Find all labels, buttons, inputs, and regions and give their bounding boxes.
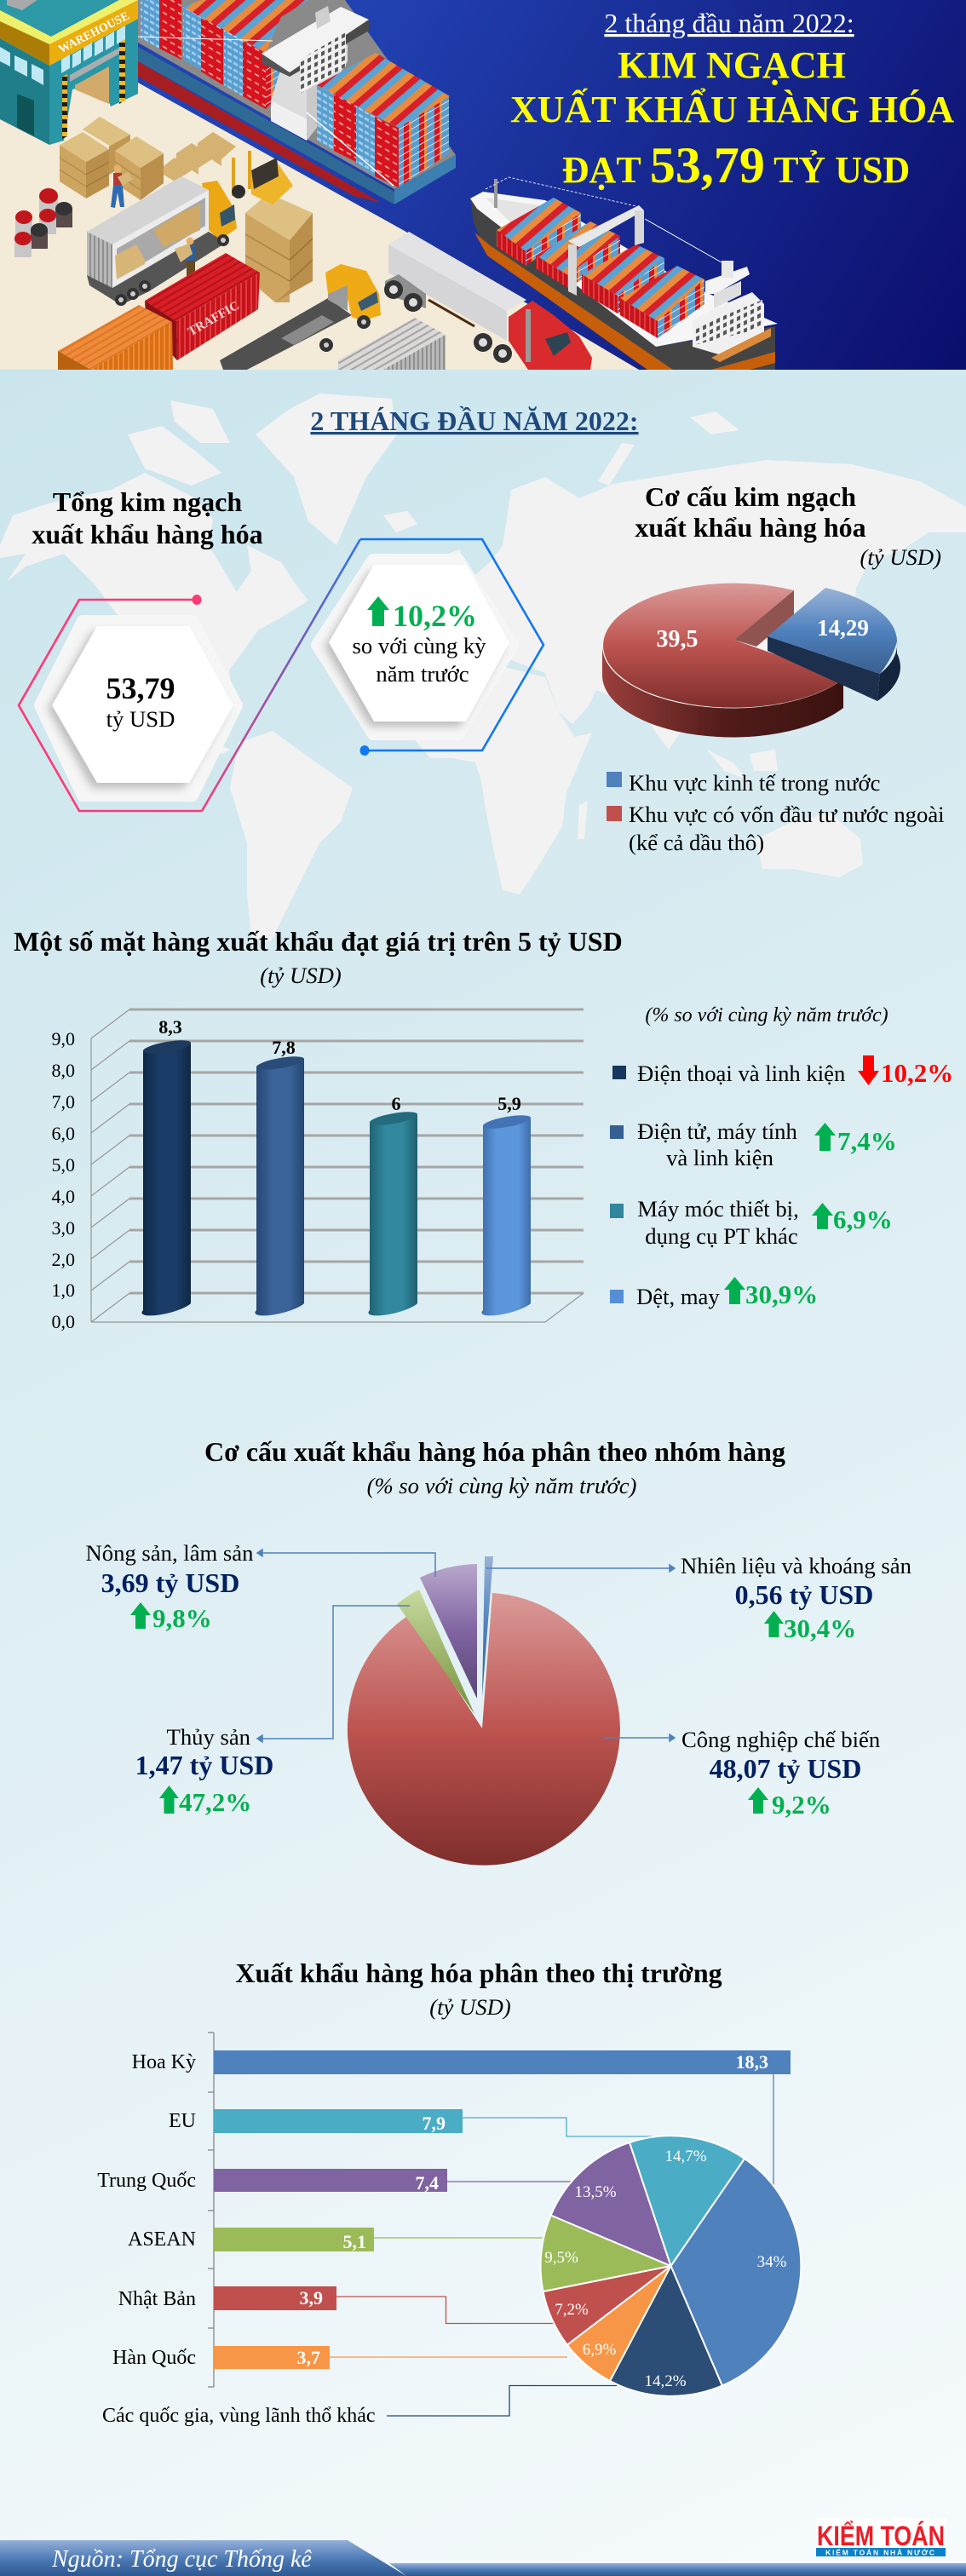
y axis labels: 3,0 [51,1217,75,1239]
unit note: (tỷ USD) [860,544,941,570]
pink hexagon outline [19,600,202,811]
leader: seafood [257,1606,410,1742]
callout: agriculture [86,1540,253,1633]
forklift [232,151,293,204]
container group C [582,244,664,296]
legend note: (% so với cùng kỳ năm trước) [645,1004,888,1026]
pie chart: markets: 9,5% [544,2249,578,2267]
legend: foreign: (kể cả dầu thô) [629,830,764,855]
y axis labels: 4,0 [51,1186,75,1207]
bar: China [97,2169,447,2194]
orange container [58,305,173,370]
bar: China: Trung Quốc [97,2170,196,2192]
ship container stack front [317,85,334,151]
pie chart: markets [541,2136,801,2396]
footer band left [0,2540,406,2576]
panel: total export [19,486,360,811]
bar: Japan: 3,9 [300,2287,323,2309]
pink dot [193,595,201,605]
callout: agriculture: 3,69 tỷ USD [101,1567,239,1598]
pie chart: markets: 34% [757,2253,787,2271]
legend: phones [612,1055,953,1088]
ship superstructure [693,292,764,355]
callout: fuel: 30,4% [784,1613,856,1643]
callout: seafood: Thủy sản [167,1724,250,1750]
growth note line 1: so với cùng kỳ [353,633,486,658]
gantry crane [568,205,644,247]
blue hexagon outline [360,539,543,750]
red truck cab [509,301,592,370]
bar: EU: 7,9 [423,2113,446,2134]
panel: export structure pie [602,481,945,855]
container ship top [138,0,456,204]
legend: electronics [610,1118,897,1170]
y axis labels: 5,0 [51,1154,75,1176]
legend: textile [610,1277,818,1309]
legend: electronics: 7,4% [837,1126,897,1156]
column: machinery 6: 6 [392,1093,400,1114]
worker carrying box [111,165,133,208]
column: textile 5.9 [481,1093,532,1315]
bar: USA [132,2050,791,2074]
column: phones 8.3: 8,3 [158,1016,182,1038]
bar chart: markets [97,2033,791,2387]
column: machinery 6 [368,1093,418,1315]
crane cables [138,37,273,41]
y axis labels: 1,0 [51,1279,75,1301]
legend: textile: Dệt, may [636,1284,720,1309]
logo: Kiểm Toán: KIỂM TOÁN NHÀ NƯỚC [825,2547,936,2557]
label: other countries: Các quốc gia, vùng lãnh thổ khác [102,2405,376,2427]
icon: up arrow [367,596,389,626]
legend: machinery: Máy móc thiết bị, [637,1196,799,1222]
hexagon shadow [48,631,228,788]
legend: phones: Điện thoại và linh kiện [637,1061,845,1086]
bar: USA: 18,3 [736,2051,768,2073]
legend: electronics: Điện tử, máy tính [637,1118,797,1144]
bar: Korea: 3,7 [296,2347,320,2368]
y axis labels: 6,0 [51,1123,75,1144]
3d pie chart [602,584,900,738]
total unit: tỷ USD [106,706,175,732]
red container [145,253,260,360]
ship bridge superstructure [271,44,348,141]
white semi trailer truck [384,232,592,370]
legend: textile: 30,9% [745,1279,818,1309]
unit note: (tỷ USD) [429,1994,511,2020]
container group D [620,266,704,321]
legend: foreign: Khu vực có vốn đầu tư nước ngoài [629,802,945,827]
warehouse building [0,0,138,145]
heading: structure: Cơ cấu kim ngạch [645,481,856,512]
connector lines [330,2074,773,2416]
heading: structure line 2: xuất khẩu hàng hóa [635,512,866,543]
panel: growth [317,539,543,756]
pie chart: markets: 6,9% [583,2341,616,2359]
column: electronics 7.8 [255,1037,305,1315]
hero title line 3: ĐẠT 53,79 TỶ USD [562,137,910,193]
callout: processing: 48,07 tỷ USD [710,1753,861,1784]
legend: electronics: và linh kiện [666,1145,773,1170]
white hexagon [329,565,509,722]
unit note: (tỷ USD) [260,963,342,988]
container group A [497,198,581,251]
callout: seafood: 1,47 tỷ USD [135,1750,273,1780]
callout: seafood: 47,2% [179,1787,251,1817]
hero subtitle: 2 tháng đầu năm 2022: [604,8,854,38]
hexagon shadow [325,571,504,727]
bar: Korea: Hàn Quốc [112,2347,196,2369]
bar: ASEAN: 5,1 [342,2231,366,2252]
callout: processing: Công nghiệp chế biến [681,1727,880,1752]
outer soft hexagon [40,621,237,796]
3d column chart [51,1009,584,1332]
pie chart: markets: 13,5% [574,2183,617,2201]
warehouse sign: WAREHOUSE [56,10,131,56]
column: phones 8.3 [141,1016,192,1315]
exploded pie chart [348,1556,620,1866]
container group B [536,221,620,275]
container lettering: TRAFFIC [186,299,242,339]
3d pie chart: 39,5 [656,626,699,653]
bar: ASEAN: ASEAN [128,2228,196,2251]
column: electronics 7.8: 7,8 [272,1037,296,1058]
bar: EU: EU [169,2110,196,2132]
bar: Japan [118,2286,336,2310]
bar: China: 7,4 [416,2172,439,2194]
legend: machinery [610,1196,893,1249]
cardboard box piles [60,117,313,302]
heading: by commodity group: Cơ cấu xuất khẩu hàng hóa phân theo nhóm hàng [204,1436,785,1467]
heading: by market: Xuất khẩu hàng hóa phân theo thị trường [235,1958,722,1988]
pie chart: markets: 7,2% [555,2301,589,2319]
heading: total export: Tổng kim ngạch [53,486,242,517]
ship mast and rigging [494,179,497,208]
bar: Japan: Nhật Bản [118,2288,196,2310]
hero banner illustration [0,0,966,370]
logo: Kiểm Toán [816,2518,946,2557]
y axis labels: 0,0 [51,1311,75,1332]
growth value: 10,2% [393,599,477,633]
heading: total export line 2: xuất khẩu hàng hóa [32,519,263,549]
pie chart: markets: 14,2% [644,2372,687,2390]
callout: fuel [681,1553,911,1643]
bar: USA: Hoa Kỳ [132,2051,196,2073]
yellow flatbed truck [220,264,381,370]
leader: agriculture [257,1550,435,1577]
heading: items over 5 billion: Một số mặt hàng xuất khẩu đạt giá trị trên 5 tỷ USD [14,926,623,957]
growth note line 2: năm trước [376,661,469,687]
callout: processing [681,1727,880,1820]
legend: domestic: Khu vực kinh tế trong nước [629,770,881,796]
connecting line [202,539,360,811]
cream quay ground [0,0,639,370]
bar: EU [169,2109,463,2134]
column: textile 5.9: 5,9 [497,1093,521,1114]
oil drums [14,188,72,257]
grey container [338,318,446,370]
world map background [0,394,966,941]
section heading: 2 THÁNG ĐẦU NĂM 2022: [310,405,639,436]
legend: machinery: dụng cụ PT khác [645,1223,798,1249]
y axis labels [51,1028,75,1332]
sea background [0,0,966,370]
pie chart: markets: 14,7% [664,2148,707,2165]
logo: Kiểm Toán: KIỂM TOÁN [817,2521,945,2551]
y axis labels: 8,0 [51,1060,75,1081]
source text: Nguồn: Tổng cục Thống kê [51,2546,312,2573]
3d pie chart: 14,29 [817,615,869,641]
y axis labels: 2,0 [51,1249,75,1270]
chart side legend [610,1004,953,1309]
y axis labels: 7,0 [51,1091,75,1113]
callout: fuel: Nhiên liệu và khoáng sản [681,1553,911,1578]
callout: seafood [135,1724,273,1817]
callout: fuel: 0,56 tỷ USD [735,1579,873,1610]
legend: phones: 10,2% [881,1058,953,1088]
callout: agriculture: Nông sản, lâm sản [86,1540,253,1566]
leader: fuel [486,1565,675,1572]
legend: machinery: 6,9% [833,1205,893,1234]
total value: 53,79 [106,671,175,705]
note: (% so với cùng kỳ năm trước) [367,1473,637,1498]
blue dot [359,745,370,756]
container ship bottom [470,177,778,370]
legend: foreign [607,802,945,855]
hero title [510,8,954,193]
footer band right [389,2563,966,2576]
delivery truck with boxes [87,176,237,306]
callout: agriculture: 9,8% [152,1603,212,1633]
hero title line 1: KIM NGẠCH [618,44,846,86]
hero title line 2: XUẤT KHẨU HÀNG HÓA [510,87,954,130]
white hexagon [52,626,233,783]
y axis labels: 9,0 [51,1028,75,1049]
bar: Korea [112,2346,330,2369]
leader: processing [604,1734,675,1741]
outer soft hexagon [317,560,513,734]
bar: ASEAN [128,2228,374,2252]
worker beside truck [175,237,196,276]
callout: processing: 9,2% [772,1790,831,1820]
